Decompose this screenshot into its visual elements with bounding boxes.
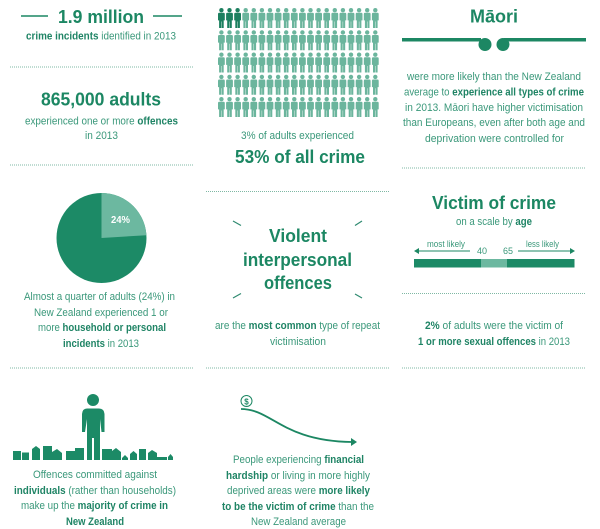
text: hardship description: People experiencing financial — [233, 454, 364, 466]
text: hardship description — [222, 454, 374, 528]
chart: age scale: less likely — [526, 239, 559, 249]
chart: pie 24% — [56, 193, 146, 283]
text: pie description: more household or personal — [38, 322, 166, 334]
chart: age scale — [414, 239, 575, 268]
text: pie description: incidents in 2013 — [63, 338, 139, 350]
text: most common — [215, 320, 380, 348]
text: Māori description: were more likely than the New Zealand — [406, 71, 581, 83]
text: one or more offences — [25, 116, 178, 142]
panel: Māori — [402, 6, 586, 145]
text: individuals description: Offences committed against — [33, 469, 157, 481]
text: Māori description: in 2013. Māori have higher victimisation — [405, 102, 583, 114]
text: Māori description — [403, 71, 585, 145]
heading: Victim of crime: Victim of crime — [432, 193, 556, 213]
icon: emphasis ticks — [233, 221, 362, 298]
icon: dollar coin: $ — [244, 398, 249, 406]
icon: koru divider — [402, 38, 586, 51]
text: Māori description: than Europeans, even after both age and — [403, 117, 585, 129]
text: one or more offences: experienced one or more offences — [25, 116, 178, 128]
text: most common: victimisation — [270, 336, 326, 348]
panel: victim of crime by age — [414, 193, 575, 268]
chart: age scale: 40 — [477, 246, 487, 256]
heading: 53% of all crime: 53% of all crime — [235, 147, 365, 167]
text: individuals description: make up the majority of crime in — [21, 500, 168, 512]
text: on a scale by age: on a scale by age — [456, 216, 532, 228]
text: pie description: New Zealand experienced 1 or — [34, 307, 168, 319]
text: hardship description: to be the victim of crime than the — [222, 501, 374, 513]
panel: sexual offences — [418, 320, 570, 348]
chart: pictogram of people — [218, 8, 379, 117]
heading: Violent interpersonal offences: Violent — [269, 226, 327, 246]
heading: Violent interpersonal offences: interpersonal — [243, 250, 352, 270]
text: hardship description: New Zealand average — [251, 516, 346, 528]
text: hardship description: deprived areas were more likely — [227, 485, 371, 497]
heading: Violent interpersonal offences — [243, 226, 352, 293]
panel: violent offences — [215, 221, 380, 348]
text: hardship description: hardship or living in more highly — [226, 470, 370, 482]
text: individuals description — [14, 469, 176, 528]
chart: age scale: 65 — [503, 246, 513, 256]
panel: financial hardship — [222, 396, 374, 528]
text: Māori description: deprivation were controlled for — [425, 133, 564, 145]
text: Māori description: average to experience all types of crime — [404, 86, 584, 98]
chart: age scale: most likely — [427, 239, 465, 249]
panel: 1.9 million incidents — [21, 7, 182, 42]
heading: 865,000 adults: 865,000 adults — [41, 90, 161, 110]
text: individuals description: New Zealand — [66, 516, 124, 528]
panel: 3% of adults — [218, 8, 379, 167]
heading: 1.9 million: 1.9 million — [58, 7, 144, 27]
heading: Violent interpersonal offences: offences — [264, 273, 332, 293]
text: pie description: Almost a quarter of adults (24%) in — [24, 291, 175, 303]
chart: pie 24%: 24% — [111, 215, 130, 226]
text: most common: are the most common type of repeat — [215, 320, 380, 332]
heading: Māori: Māori — [470, 6, 518, 26]
panel: 865,000 adults — [25, 90, 178, 142]
icon: dollar coin — [241, 396, 252, 406]
text: crime incidents: crime incidents identified in 2013 — [26, 30, 176, 42]
text: one or more offences: in 2013 — [85, 130, 118, 142]
text: 2% of adults: 2% of adults were the victim of — [425, 320, 564, 332]
text: 1 or more sexual offences: 1 or more sexual offences in 2013 — [418, 336, 570, 348]
panel: offences against individuals — [13, 394, 176, 528]
panel: quarter of adults — [24, 193, 175, 350]
icon: person over skyline — [13, 394, 173, 460]
text: pie description — [24, 291, 175, 350]
arrow: declining curve — [241, 409, 357, 446]
text: individuals description: individuals (rather than households) — [14, 485, 176, 497]
text: 3% of adults experienced: 3% of adults experienced — [241, 130, 354, 142]
